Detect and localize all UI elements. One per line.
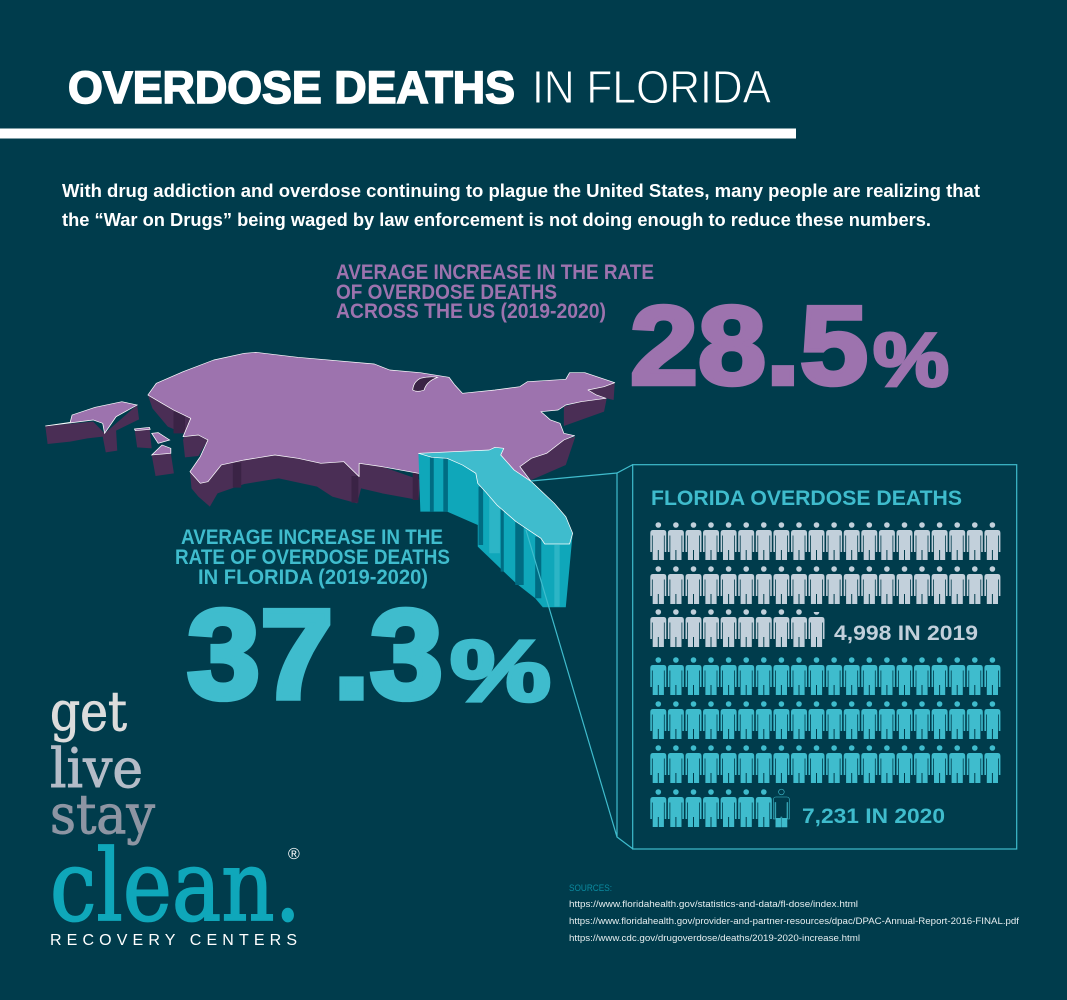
US rate number: [630, 284, 949, 408]
partial person: [773, 789, 789, 827]
2020 label: 7,231 IN 2020: [802, 804, 945, 828]
Florida rate number: [187, 583, 551, 725]
Florida rate heading: [175, 526, 450, 589]
panel heading: FLORIDA OVERDOSE DEATHS: [651, 486, 962, 510]
map: Alaska and Hawaii: [45, 402, 174, 476]
map: extruded coast: [148, 383, 615, 507]
map: Florida side: [418, 453, 573, 607]
sources: https://www.cdc.gov/drugoverdose/deaths/2019-2020-increase.html: [569, 933, 860, 944]
sources: [569, 883, 1019, 944]
Florida rate number: %: [450, 624, 551, 720]
map: Lake Michigan: [413, 377, 438, 391]
Florida rate heading: RATE OF OVERDOSE DEATHS: [175, 546, 450, 569]
2019 label: 4,998 IN 2019: [834, 621, 978, 645]
logo: clean.: [50, 830, 301, 944]
intro text: the “War on Drugs” being waged by law enforcement is not doing enough to reduce these numbers.: [62, 209, 931, 230]
logo: get: [50, 680, 127, 743]
logo: stay: [50, 783, 155, 846]
intro text: With drug addiction and overdose continuing to plague the United States, many people are realizing that: [62, 180, 980, 201]
US rate number: 28.5: [630, 284, 868, 408]
US rate heading: AVERAGE INCREASE IN THE RATE: [336, 261, 654, 284]
Florida rate heading: IN FLORIDA (2019-2020): [198, 566, 428, 589]
US rate heading: ACROSS THE US (2019-2020): [336, 300, 606, 323]
sources: https://www.floridahealth.gov/statistics-and-data/fl-dose/index.html: [569, 899, 858, 910]
map: United States with Florida highlighted: [45, 352, 615, 607]
map: contiguous states: [148, 352, 615, 483]
Florida rate heading: AVERAGE INCREASE IN THE: [181, 526, 443, 549]
US rate heading: [336, 261, 654, 323]
logo: RECOVERY CENTERS: [50, 932, 297, 949]
panel: Florida overdose deaths: [633, 465, 1017, 849]
title underline bar: [0, 128, 796, 138]
US rate heading: OF OVERDOSE DEATHS: [336, 281, 557, 304]
sources: https://www.floridahealth.gov/provider-and-partner-resources/dpac/DPAC-Annual-Report-2016-FINAL.pdf: [569, 916, 1019, 927]
callout connector lines: [526, 464, 633, 849]
title: [68, 61, 771, 113]
logo: [50, 680, 301, 949]
intro text: [62, 180, 980, 230]
logo: ®: [288, 846, 300, 863]
map: Florida side stripes: [430, 457, 541, 598]
map: Florida top: [418, 447, 573, 544]
partial head: [813, 609, 820, 612]
Florida rate number: 37.3: [187, 583, 443, 725]
logo: live: [50, 737, 143, 800]
US rate number: %: [873, 318, 949, 403]
title: IN FLORIDA: [532, 61, 771, 113]
pictogram: 2020 deaths: [650, 657, 1000, 827]
title: OVERDOSE DEATHS: [68, 62, 515, 113]
sources: SOURCES:: [569, 883, 612, 894]
pictogram: 2019 deaths: [650, 522, 1000, 647]
